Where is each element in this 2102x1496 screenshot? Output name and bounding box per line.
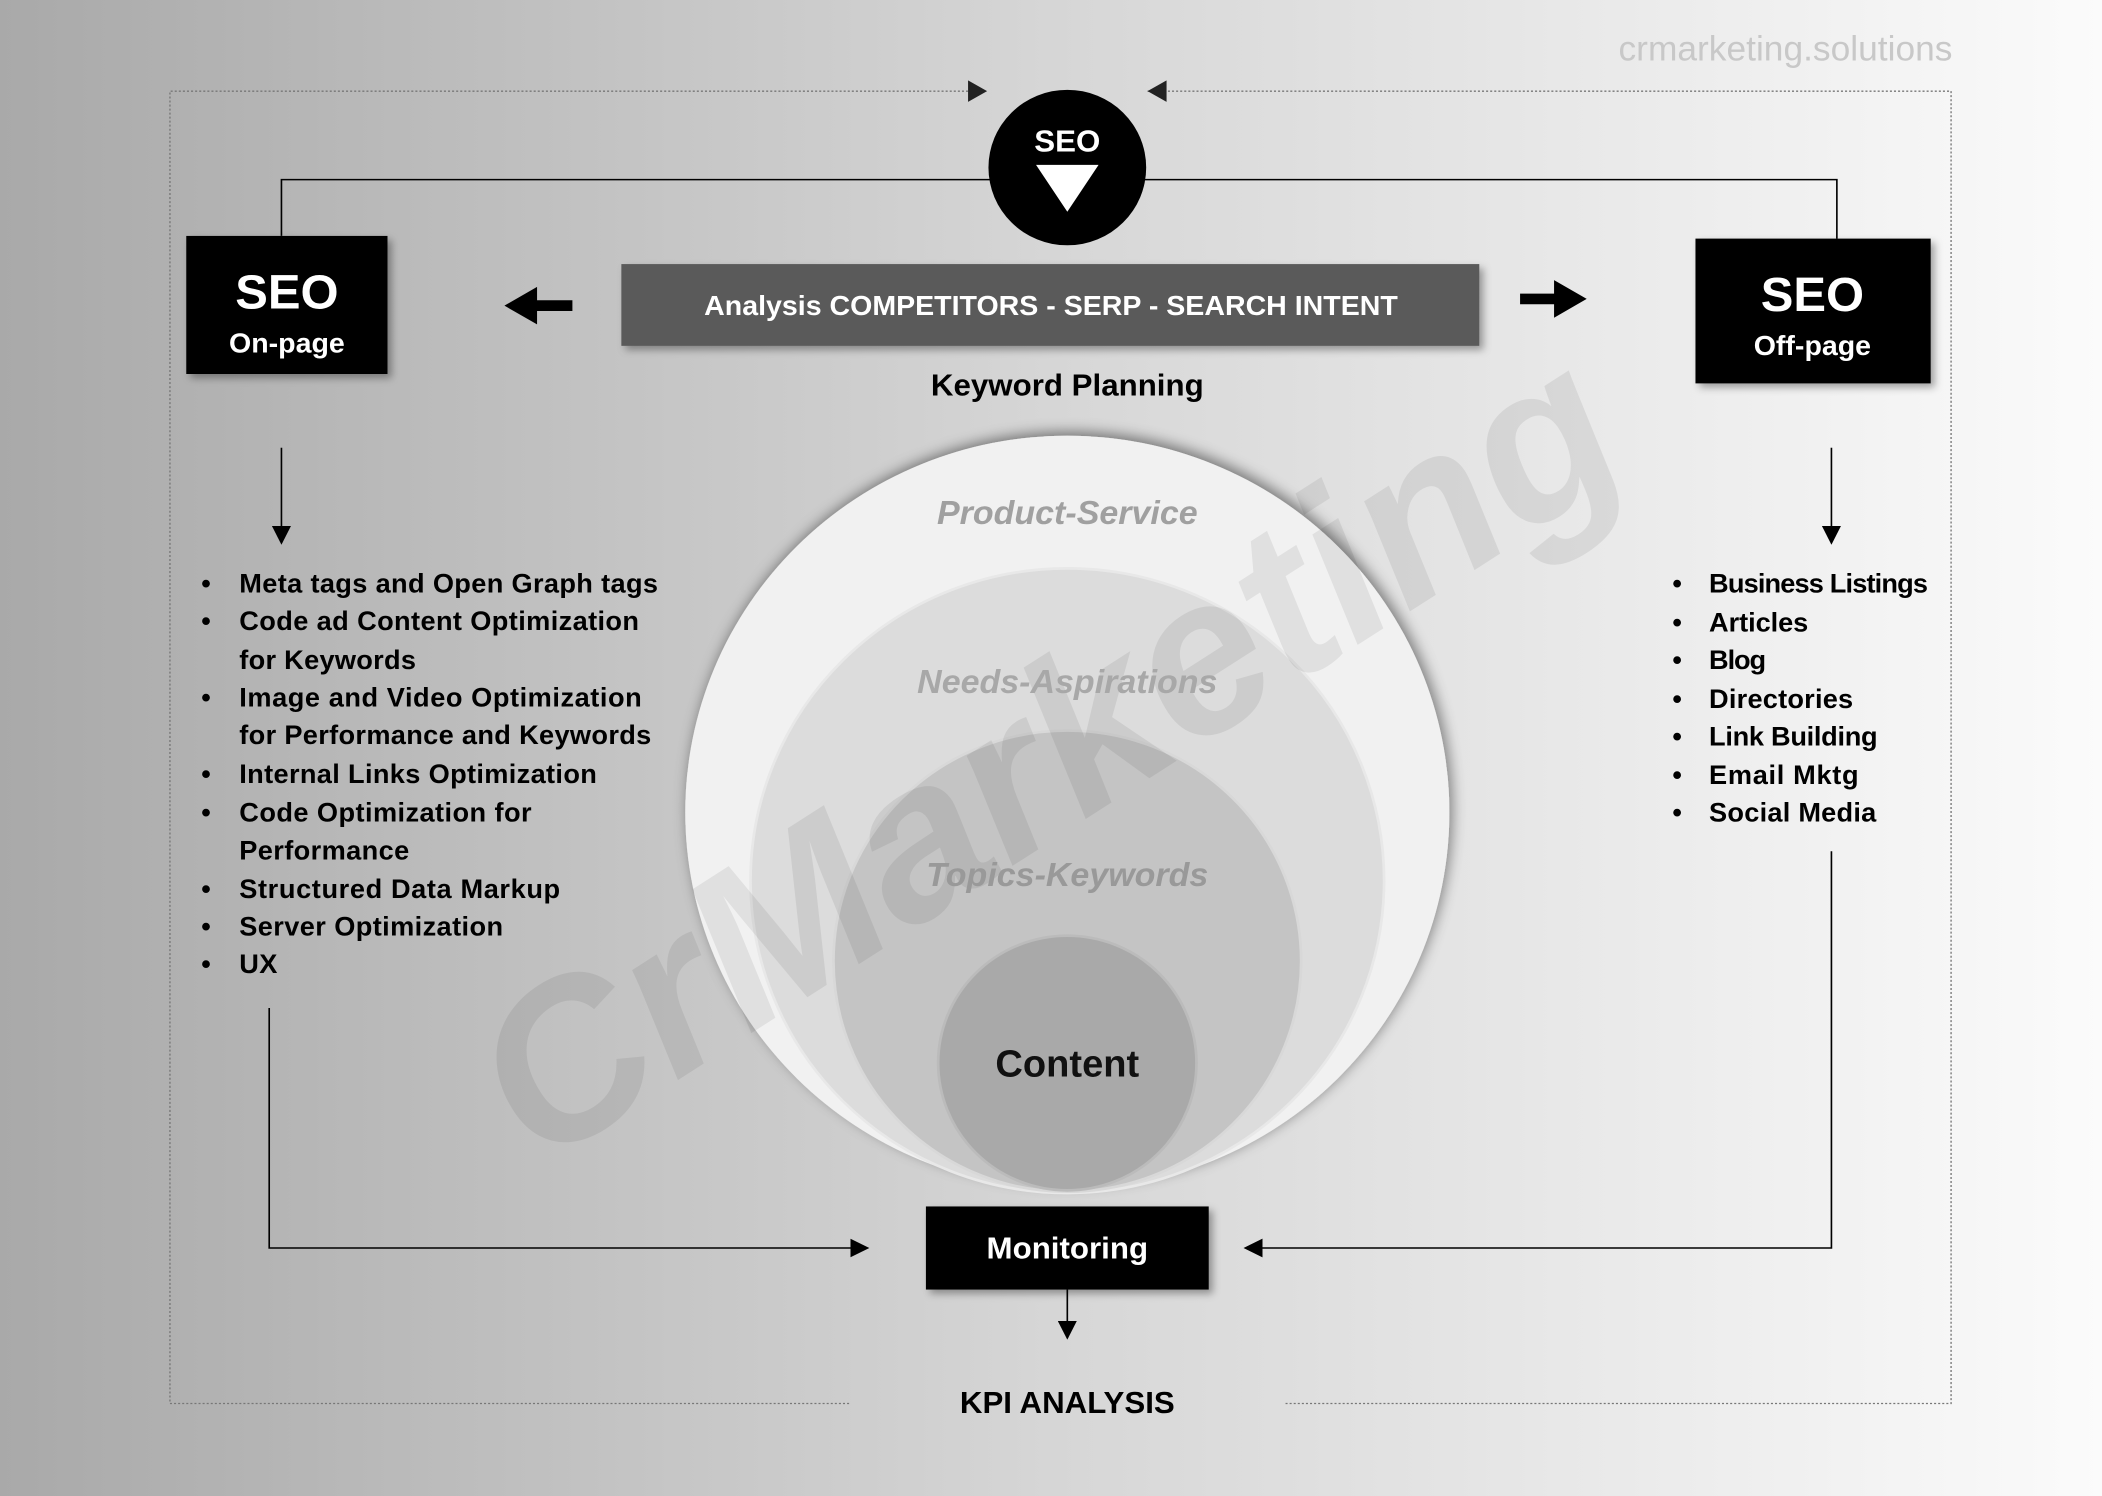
on-page list: Image and Video Optimization [239, 683, 642, 712]
off-page list: Articles [1709, 608, 1808, 637]
off-page list: Email Mktg [1709, 760, 1859, 790]
off-page list: Blog [1709, 645, 1766, 675]
arrow right [1520, 280, 1587, 318]
SEO Off-page box [1695, 239, 1931, 383]
watermark CrMarketing: CrMarketing [429, 299, 1663, 1209]
on-page list: • [201, 569, 211, 598]
off-page list: Social Media [1709, 798, 1877, 828]
on-page list: Internal Links Optimization [239, 759, 597, 789]
off-page list: Directories [1709, 684, 1853, 714]
on-page list: • [201, 683, 211, 712]
on-page list: Code Optimization for [239, 798, 532, 828]
on-page list: for Keywords [239, 645, 416, 675]
off-page list: Business Listings [1709, 569, 1928, 598]
off-page list: • [1672, 684, 1682, 714]
on-page list: • [201, 912, 211, 942]
on-page list: • [201, 759, 211, 789]
on-page list: Code ad Content Optimization [239, 606, 639, 636]
arrow left [504, 287, 572, 324]
icon: SEO circle: SEO [1034, 124, 1100, 158]
connectors to Monitoring [269, 1008, 867, 1248]
arrow down to KPI [1066, 1290, 1068, 1338]
circle labels [917, 494, 1217, 1085]
SEO Off-page box: Off-page [1754, 330, 1871, 362]
off-page list: Link Building [1709, 721, 1878, 751]
down arrows lists [280, 448, 282, 543]
on-page list: Server Optimization [239, 912, 503, 942]
off-page list: • [1672, 721, 1682, 751]
SEO Off-page box: SEO [1761, 268, 1864, 322]
label: Content: Content [995, 1044, 1140, 1085]
off-page list: • [1672, 608, 1682, 637]
on-page list: Meta tags and Open Graph tags [239, 569, 658, 598]
Monitoring box [926, 1206, 1209, 1290]
Keyword Planning heading: Keyword Planning [931, 368, 1204, 402]
icon: SEO circle [988, 90, 1146, 245]
frame arrows [968, 80, 1167, 102]
SEO On-page box: SEO [235, 266, 339, 319]
on-page list: UX [239, 949, 277, 979]
dotted frame [170, 91, 1951, 1404]
nested circles [685, 436, 1449, 1193]
on-page list: • [201, 874, 211, 904]
connector lines top [281, 180, 1837, 239]
off-page list: • [1672, 798, 1682, 828]
watermark url: crmarketing.solutions [1619, 30, 1952, 68]
off-page list [1672, 569, 1928, 828]
SEO On-page box [186, 236, 387, 374]
on-page list: • [201, 606, 211, 636]
label: Needs-Aspirations: Needs-Aspirations [917, 663, 1217, 701]
on-page list: Structured Data Markup [239, 874, 560, 904]
SEO On-page box: On-page [229, 328, 345, 360]
off-page list: • [1672, 760, 1682, 790]
on-page list: Performance [239, 835, 409, 865]
KPI ANALYSIS: KPI ANALYSIS [960, 1385, 1175, 1420]
Monitoring box: Monitoring [987, 1231, 1148, 1266]
on-page list: • [201, 949, 211, 979]
label: Topics-Keywords: Topics-Keywords [926, 856, 1208, 894]
off-page list: • [1672, 569, 1682, 598]
on-page list: for Performance and Keywords [239, 720, 651, 750]
on-page list [201, 569, 658, 979]
analysis bar [621, 264, 1479, 346]
label: Product-Service: Product-Service [937, 494, 1198, 532]
off-page list: • [1672, 645, 1682, 675]
on-page list: • [201, 798, 211, 828]
analysis bar: Analysis COMPETITORS - SERP - SEARCH INTENT [704, 290, 1399, 322]
